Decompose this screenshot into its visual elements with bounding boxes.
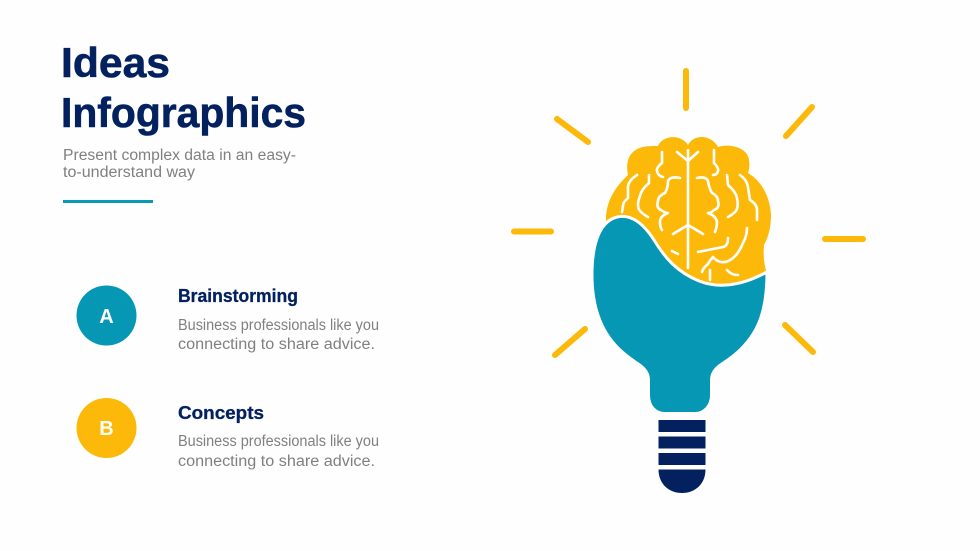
icon: light bulb glass [592,216,767,414]
description B: Business professionals like you [178,433,379,450]
icon: bulb screw base [658,420,706,493]
description B: connecting to share advice. [178,453,375,470]
badge B: B [99,418,114,440]
description A [178,317,379,353]
badge B [76,398,136,458]
subtitle: to-understand way [63,164,195,181]
badge A [76,286,136,346]
title underline [63,200,153,203]
description B [178,433,379,470]
title: Ideas [61,39,170,86]
description A: Business professionals like you [178,317,379,334]
heading A: Brainstorming [178,285,298,306]
title: Infographics [61,89,306,136]
subtitle: Present complex data in an easy- [63,147,296,164]
item A: Brainstorming [76,285,379,353]
badge A: A [99,306,114,328]
subtitle [63,147,296,181]
icon: brain [606,137,771,292]
item B: Concepts [76,398,379,470]
title [61,39,306,136]
brain folds [622,150,757,280]
icon: light rays [514,71,863,355]
description A: connecting to share advice. [178,336,375,353]
heading B: Concepts [178,402,264,423]
